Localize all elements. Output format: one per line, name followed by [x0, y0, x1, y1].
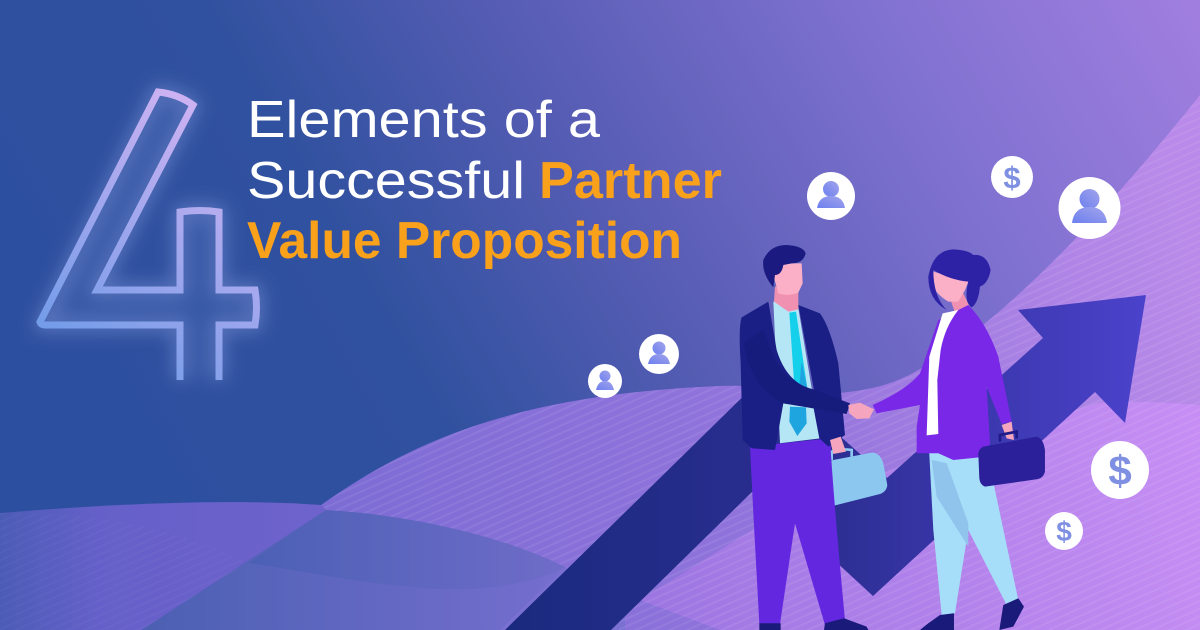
title: Elements of a [247, 91, 600, 149]
woman neck [950, 293, 969, 313]
woman hand [1002, 422, 1014, 440]
woman jacket [873, 305, 1012, 460]
title: Successful [247, 152, 525, 210]
businesswoman [873, 249, 1045, 630]
man jacket [740, 302, 845, 450]
rising zigzag arrow [505, 295, 1146, 630]
woman trousers [928, 435, 1018, 615]
man shoes [759, 618, 868, 630]
handshake [848, 403, 874, 419]
man neck [774, 287, 798, 312]
man briefcase [830, 449, 887, 506]
icon: dollar upper: $ [1003, 160, 1021, 195]
woman face [932, 272, 968, 302]
icon: dollar large: $ [1108, 447, 1132, 494]
icon: dollar small [1045, 512, 1083, 550]
icon: dollar upper [991, 156, 1033, 198]
man trousers [750, 438, 845, 625]
man hair [763, 245, 806, 287]
woman shoes [920, 598, 1024, 630]
woman shirt [927, 310, 958, 435]
man arm [744, 330, 850, 414]
icon: person small [588, 364, 622, 398]
title [247, 91, 722, 270]
numeral 4 outline [40, 92, 256, 380]
man shirt [773, 302, 820, 443]
icon: dollar large [1091, 441, 1149, 499]
title: Value Proposition [247, 212, 682, 270]
man tie [789, 312, 807, 436]
man hand on case [830, 437, 846, 454]
woman briefcase [978, 432, 1045, 487]
businessman [740, 245, 887, 630]
woman hair [928, 249, 991, 310]
icon: dollar small: $ [1056, 516, 1072, 547]
man face [773, 263, 803, 295]
icon: person large [1058, 177, 1120, 239]
title: Partner [539, 152, 722, 210]
icon: person mid [639, 334, 679, 374]
icon: person upper [807, 172, 855, 220]
